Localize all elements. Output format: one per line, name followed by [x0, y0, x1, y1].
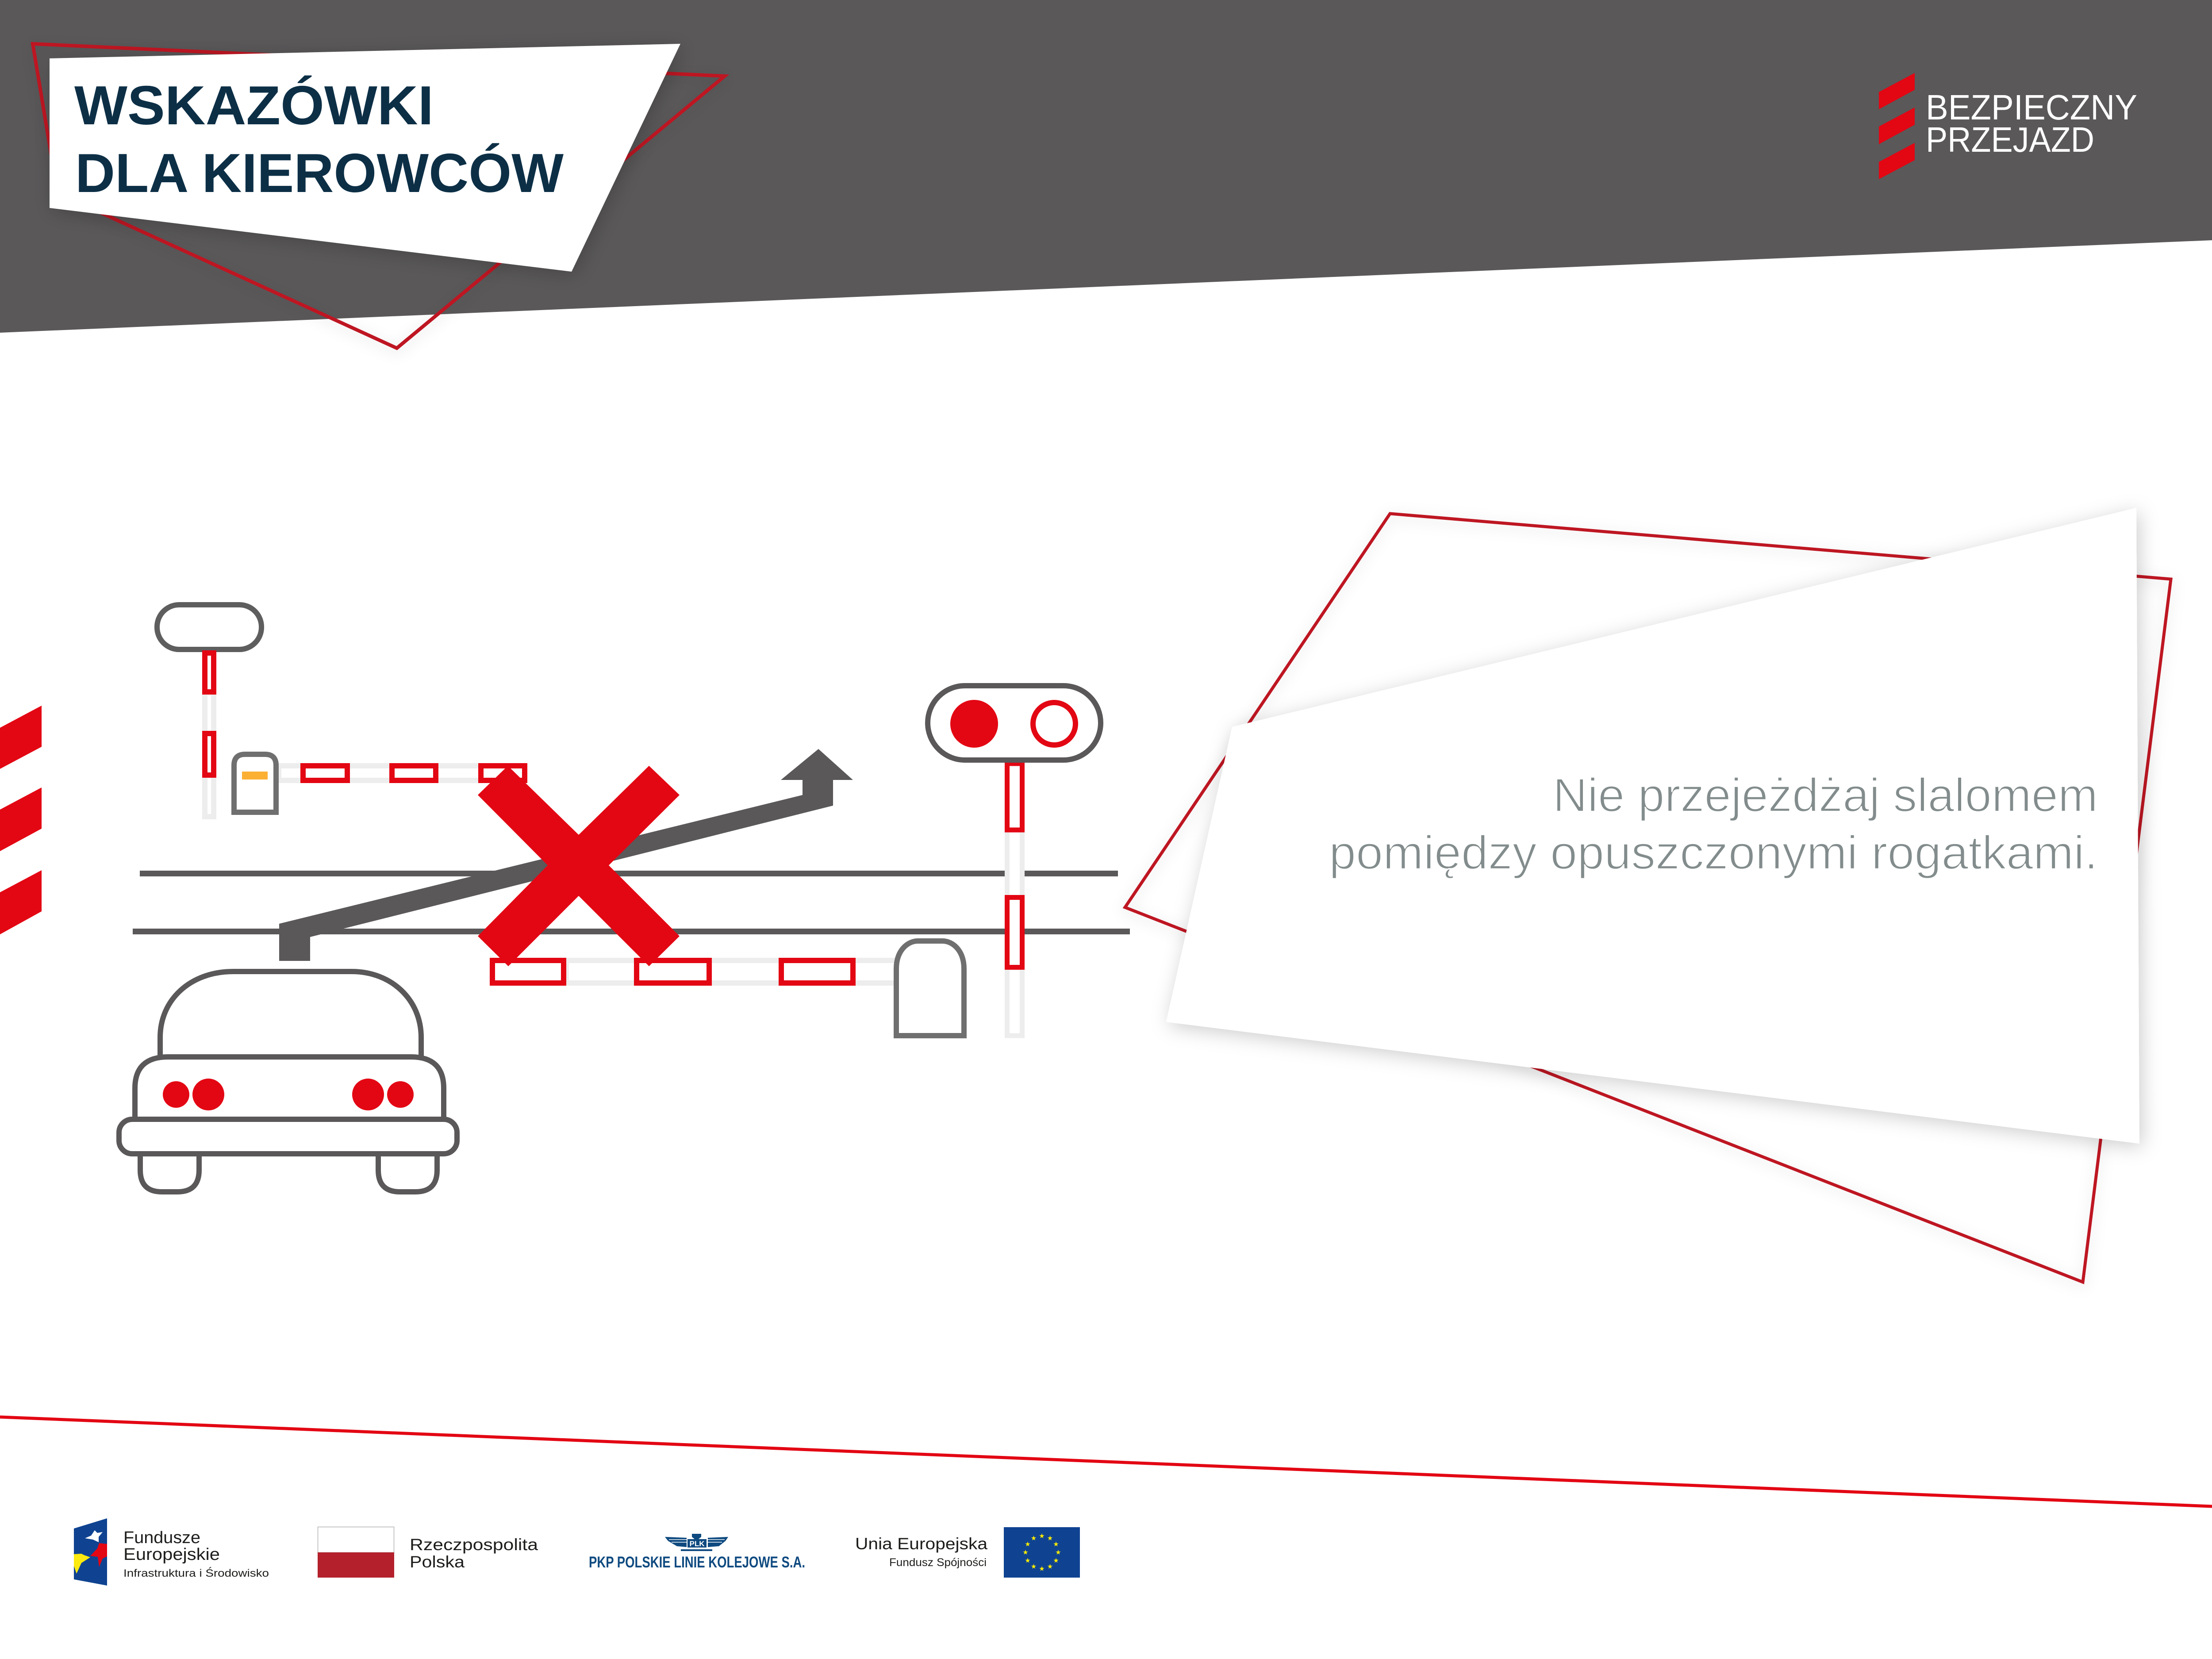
- Rzeczpospolita text: Rzeczpospolita: [410, 1536, 538, 1554]
- car wheels: [140, 1154, 437, 1192]
- title text: DLA KIEROWCÓW: [75, 143, 564, 204]
- title red outline: [33, 44, 725, 348]
- EU flag: [1004, 1527, 1080, 1578]
- far signal head: [157, 605, 261, 649]
- EU text: [855, 1535, 987, 1569]
- title white panel: [50, 44, 680, 272]
- EU text: Unia Europejska: [855, 1535, 987, 1553]
- logo: Rzeczpospolita Polska: [318, 1527, 538, 1578]
- rails: [133, 871, 1130, 934]
- tip text: pomiędzy opuszczonymi rogatkami.: [1329, 826, 2098, 879]
- far signal pole: [205, 653, 214, 817]
- FE emblem: [74, 1518, 107, 1586]
- PKP text: PKP POLSKIE LINIE KOLEJOWE S.A.: [589, 1554, 805, 1571]
- car rear lights: [163, 1079, 414, 1110]
- slalom arrow: [279, 749, 853, 961]
- car body: [135, 1057, 444, 1119]
- FE text: [123, 1528, 269, 1579]
- title block: [33, 44, 725, 348]
- logo text: BEZPIECZNY: [1926, 88, 2137, 127]
- red prohibition cross: [478, 766, 680, 966]
- left edge red stripes: [0, 706, 42, 934]
- car bumper: [119, 1119, 457, 1154]
- logo: Bezpieczny Przejazd: [1879, 73, 2137, 179]
- logo: Fundusze Europejskie: [74, 1518, 269, 1586]
- tip text: Nie przejeżdżaj slalomem: [1553, 768, 2098, 822]
- active red light: [950, 700, 998, 748]
- Rzeczpospolita text: [410, 1536, 538, 1571]
- far barrier post: [234, 754, 276, 812]
- far signal and barrier: [157, 605, 525, 817]
- FE text: Fundusze: [123, 1528, 200, 1547]
- near barrier: [492, 941, 964, 1036]
- FE text: Europejskie: [123, 1545, 220, 1564]
- far post warning light: [242, 772, 268, 780]
- title text: WSKAZÓWKI: [74, 75, 434, 136]
- car cabin: [160, 972, 421, 1056]
- footer red line: [0, 1417, 2212, 1506]
- FE text: Infrastruktura i Środowisko: [123, 1567, 269, 1579]
- logo: PKP PLK: [589, 1534, 805, 1571]
- tip white panel: [1166, 508, 2139, 1144]
- near signal head: [928, 686, 1101, 760]
- inactive light: [1033, 703, 1075, 745]
- logo text: [1926, 88, 2137, 159]
- logo text: PRZEJAZD: [1926, 120, 2094, 159]
- header banner: [0, 0, 2212, 333]
- Rzeczpospolita text: Polska: [410, 1553, 465, 1571]
- EU text: Fundusz Spójności: [889, 1556, 987, 1569]
- far barrier arm: [279, 766, 525, 780]
- title text: [74, 75, 564, 204]
- near barrier post: [896, 941, 964, 1036]
- PLK emblem: PLK: [689, 1540, 705, 1548]
- near signal: [928, 686, 1101, 1036]
- near signal pole: [1007, 764, 1022, 1036]
- tip red outline: [1125, 514, 2171, 1282]
- PLK emblem: [665, 1534, 728, 1551]
- logo stripes: [1879, 73, 1915, 179]
- logo: Unia Europejska: [855, 1527, 1080, 1578]
- tip text: [1329, 768, 2098, 879]
- tip panel: [1125, 508, 2171, 1282]
- car: [119, 972, 457, 1192]
- near barrier arm: [492, 960, 898, 983]
- Polish flag: [318, 1527, 394, 1578]
